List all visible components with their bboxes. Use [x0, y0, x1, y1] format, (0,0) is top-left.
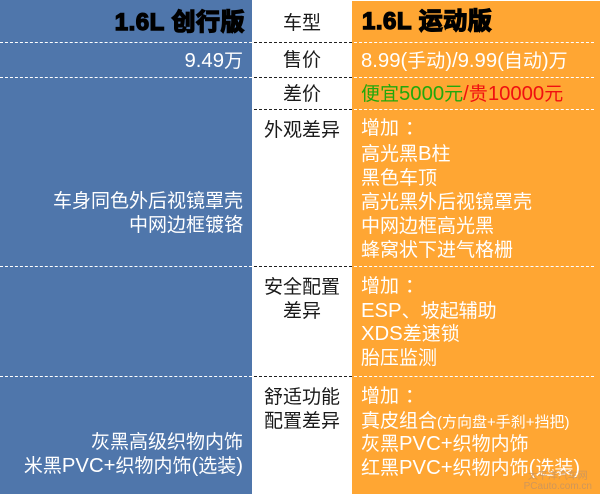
sport price: 8.99(手动)/9.99(自动)万 — [361, 50, 568, 72]
exterior text: 车身同色外后视镜罩壳 — [53, 191, 243, 212]
sport exterior list: 蜂窝状下进气格栅 — [361, 240, 513, 261]
comfort text: 灰黑高级织物内饰 — [91, 432, 243, 453]
sport exterior list — [361, 118, 532, 261]
heading: 1.6L 创行版: 1.6L 创行版 — [115, 9, 245, 36]
sport exterior list: 黑色车顶 — [361, 168, 437, 189]
sport exterior list: 增加 ： — [361, 118, 424, 139]
label: 安全配置差异: 安全配置 — [264, 277, 340, 298]
sport safety list: 胎压监测 — [361, 348, 437, 369]
sport comfort list: 增加 ： — [361, 386, 424, 407]
watermark: PCauto.com.cn — [524, 481, 592, 492]
comfort text — [24, 432, 243, 477]
label: 外观差异: 外观差异 — [264, 120, 340, 141]
panel: 1.6L creative trim column — [0, 0, 252, 494]
label: 安全配置差异: 差异 — [283, 301, 321, 322]
price: 9.49万: 9.49万 — [184, 50, 243, 72]
label: 差价: 差价 — [283, 84, 321, 105]
label: 车型: 车型 — [283, 13, 321, 34]
price difference: 便宜5000元/贵10000元 — [361, 83, 563, 105]
panel: 1.6L sport trim column — [352, 1, 600, 494]
sport comfort list: 真皮组合(方向盘+手刹+挡把) — [361, 411, 570, 432]
comfort text: 米黑PVC+织物内饰(选装) — [24, 455, 243, 477]
heading: 1.6L 运动版: 1.6L 运动版 — [362, 8, 492, 35]
watermark: 太平洋汽车网 — [528, 471, 588, 482]
label: 售价: 售价 — [283, 50, 321, 71]
sport comfort list: 灰黑PVC+织物内饰 — [361, 433, 529, 455]
sport safety list — [361, 276, 497, 369]
sport comfort list: 红黑PVC+织物内饰(选装) — [361, 457, 580, 479]
label: 舒适功能配置差异: 舒适功能 — [264, 387, 340, 408]
sport exterior list: 中网边框高光黑 — [361, 216, 494, 237]
label: 舒适功能配置差异: 配置差异 — [264, 411, 340, 432]
sport comfort list — [361, 386, 580, 479]
label: 舒适功能配置差异 — [264, 387, 340, 432]
exterior text: 中网边框镀铬 — [129, 215, 243, 236]
sport safety list: 增加 ： — [361, 276, 424, 297]
exterior text — [53, 190, 243, 236]
sport safety list: ESP、坡起辅助 — [361, 300, 497, 322]
sport safety list: XDS差速锁 — [361, 323, 460, 345]
label: 安全配置差异 — [264, 276, 340, 322]
watermark — [524, 470, 592, 492]
sport exterior list: 高光黑B柱 — [361, 143, 451, 165]
sport exterior list: 高光黑外后视镜罩壳 — [361, 192, 532, 213]
